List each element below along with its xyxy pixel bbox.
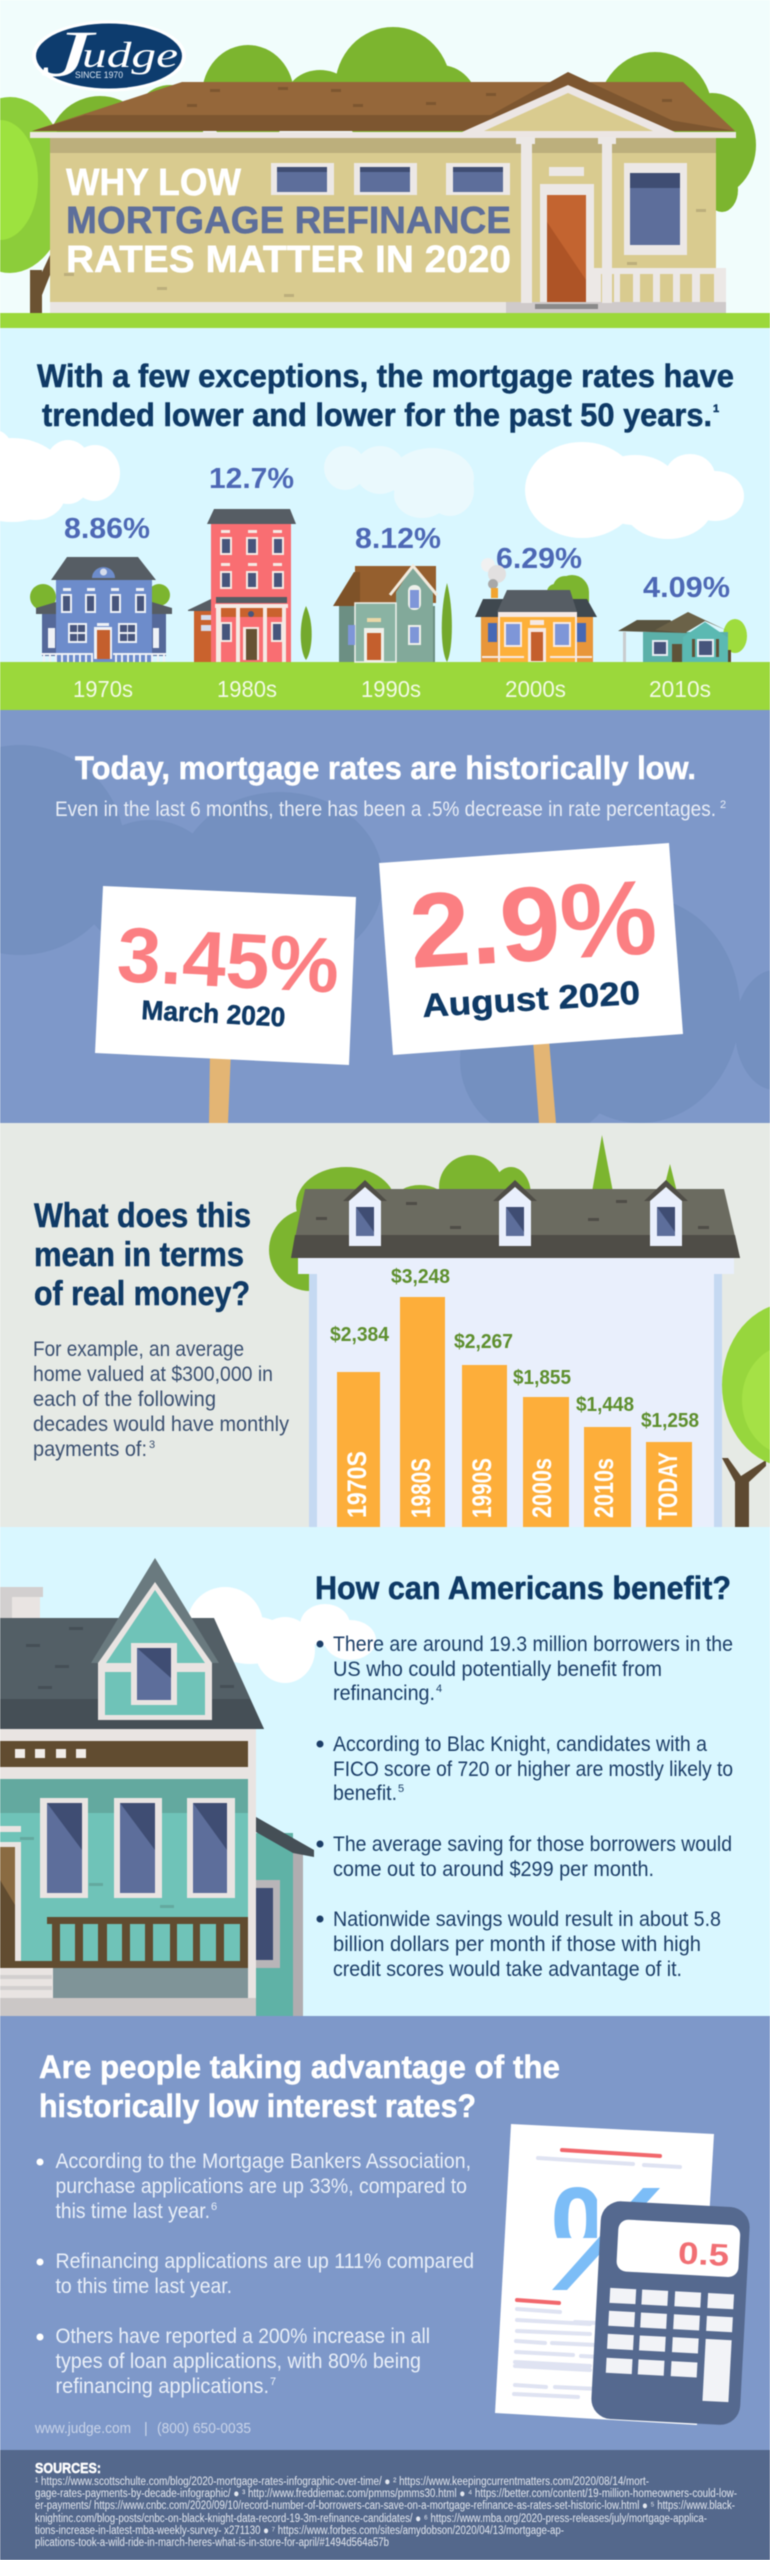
- rate values: 8.12%: [355, 523, 441, 555]
- rate values: 12.7%: [209, 463, 294, 495]
- bullet: savings: The average saving for those borrowers would: [333, 1833, 732, 1856]
- icon: 1980s house: [188, 509, 312, 662]
- sources list: tions-increase-in-latest-mba-weekly-survey- x271130 ● ⁷ https://www.forbes.com/sites/amydobson/2020/04/13/mortgage-ap-: [35, 2525, 564, 2537]
- heading: [37, 358, 734, 433]
- body text: each of the following: [33, 1388, 216, 1411]
- house wall: [30, 132, 736, 313]
- bullet: purchase applications: purchase applications are up 33%, compared to: [56, 2175, 467, 2198]
- sources list: plications-took-a-wild-ride-in-march-heres-what-is-in-store-for-april/#1494d564a57b: [35, 2537, 389, 2549]
- bullet: FICO: [316, 1733, 733, 1805]
- right window: [624, 163, 687, 255]
- rate values: [64, 463, 730, 604]
- heading: How can Americans benefit?: [315, 1570, 731, 1606]
- body text: [33, 1338, 289, 1461]
- sign: August 2020: August 2020: [421, 974, 641, 1024]
- bullet: loan applications: 7: [270, 2376, 276, 2388]
- bullet: nationwide: [316, 1908, 721, 1981]
- sign: March 2020: 3.45%: [115, 910, 341, 1010]
- sign: March 2020: March 2020: [141, 995, 286, 1033]
- back trees: [48, 27, 756, 212]
- bullet: FICO: benefit.: [333, 1782, 397, 1805]
- logo: J: [40, 18, 97, 91]
- bar chart: $3,248: [391, 1266, 450, 1288]
- panel: fifty year rates: [0, 328, 770, 710]
- decade labels: 1970s: [73, 676, 133, 702]
- heading: [39, 2049, 560, 2124]
- clouds: [0, 430, 744, 539]
- subheading: 2: [720, 799, 726, 811]
- icon: 1990s house: [333, 566, 452, 662]
- sign: August 2020: [379, 843, 683, 1123]
- bar chart: 1980S: [406, 1458, 436, 1518]
- bullet: savings: [316, 1833, 732, 1881]
- heading: Are people taking advantage of the: [39, 2049, 560, 2085]
- bullet: borrowers: There are around 19.3 million borrowers in the: [333, 1633, 733, 1656]
- bullet: savings: come out to around $299 per month.: [333, 1858, 654, 1881]
- cloud: [187, 1587, 376, 1683]
- bullet: refinancing applications: [36, 2250, 474, 2298]
- bullet: borrowers: refinancing.: [333, 1682, 435, 1705]
- bar chart: [330, 1266, 699, 1527]
- icon: calculator: [590, 2200, 751, 2426]
- bullet: FICO: According to Blac Knight, candidates with a: [333, 1733, 707, 1756]
- bullet: borrowers: 4: [436, 1683, 442, 1695]
- icon: paper document: %: [551, 2157, 669, 2322]
- trees behind house: [269, 1135, 677, 1291]
- panel: taking advantage: [0, 2016, 770, 2450]
- bullet: refinancing applications: to this time last year.: [56, 2275, 232, 2298]
- bar chart: $1,258: [641, 1410, 699, 1432]
- bar chart: 2010s: [589, 1458, 619, 1518]
- bullet: borrowers: [316, 1633, 733, 1705]
- bullet: FICO: FICO score of 720 or higher are mostly likely to: [333, 1758, 733, 1781]
- heading: Today, mortgage rates are historically low.: [75, 750, 696, 786]
- panel: historically low rates: [0, 710, 770, 1140]
- teal house: [0, 1558, 314, 2016]
- decade labels: 1980s: [217, 676, 277, 702]
- icon: calculator: 0.5: [677, 2235, 730, 2273]
- house with roof: [291, 1189, 740, 1527]
- tree: [442, 583, 452, 662]
- panel: header house: [0, 0, 770, 328]
- bar chart: $1,448: [576, 1394, 634, 1416]
- heading: historically low interest rates?: [39, 2088, 476, 2124]
- bar chart: $2,267: [454, 1331, 513, 1353]
- bullet: purchase applications: 6: [211, 2201, 217, 2213]
- contact line: [34, 2421, 251, 2437]
- bullet: purchase applications: According to the Mortgage Bankers Association,: [56, 2150, 471, 2173]
- bullet: loan applications: types of loan applications, with 80% being: [56, 2350, 421, 2373]
- body text: payments of:: [33, 1438, 147, 1461]
- decade labels: [73, 676, 711, 702]
- three windows: [271, 163, 510, 195]
- bullet: nationwide: billion dollars per month if those with high: [333, 1933, 701, 1956]
- sources list: ¹ https://www.scottschulte.com/blog/2020-mortgage-rates-infographic-over-time/ ● ² https://www.keepingcurrentmatters.com/2020/08/14/mort-: [35, 2476, 649, 2488]
- icon: paper document: [495, 2124, 714, 2425]
- panel: how Americans benefit: [0, 1527, 770, 2016]
- icon: 2010s house: [618, 612, 747, 662]
- heading: of real money?: [34, 1275, 250, 1313]
- heading: 1: [713, 403, 719, 415]
- title: RATES MATTER IN 2020: [66, 239, 511, 281]
- bar chart: 1970S: [342, 1451, 372, 1518]
- right tree: [722, 1303, 770, 1527]
- body text: home valued at $300,000 in: [33, 1363, 273, 1386]
- tree: [301, 606, 312, 660]
- bar chart: 2000s: [527, 1458, 557, 1518]
- bar chart: $2,384: [330, 1324, 390, 1346]
- logo: udge: [82, 35, 178, 75]
- bullet: loan applications: refinancing applications.: [56, 2375, 269, 2398]
- title: MORTGAGE REFINANCE: [66, 200, 511, 242]
- heading: With a few exceptions, the mortgage rates have: [37, 358, 734, 394]
- icon: 1970s house: [30, 557, 172, 662]
- bullet: purchase applications: this time last year.: [56, 2200, 210, 2223]
- heading: trended lower and lower for the past 50 years.: [42, 397, 712, 433]
- bullet: FICO: 5: [398, 1783, 404, 1795]
- logo: [32, 18, 186, 92]
- contact line: www.judge.com: [34, 2421, 131, 2437]
- gable: [462, 85, 675, 136]
- bullet: refinancing applications: Refinancing applications are up 111% compared: [56, 2250, 474, 2273]
- dormers: [343, 1180, 688, 1246]
- decade labels: 1990s: [361, 676, 421, 702]
- subheading: Even in the last 6 months, there has been a .5% decrease in rate percentages.: [55, 798, 716, 821]
- bullet: borrowers: US who could potentially benefit from: [333, 1658, 662, 1681]
- sources list: [35, 2476, 737, 2549]
- sources heading: SOURCES:: [35, 2460, 101, 2477]
- body text: decades would have monthly: [33, 1413, 289, 1436]
- sign: March 2020: [95, 886, 356, 1123]
- columns and door: [516, 137, 616, 303]
- rate values: 4.09%: [643, 572, 730, 604]
- icon: 2000s house: [475, 558, 597, 662]
- bullet: loan applications: Others have reported a 200% increase in all: [56, 2325, 430, 2348]
- heading: mean in terms: [34, 1236, 244, 1274]
- porch railing: [594, 268, 726, 302]
- rate values: 8.86%: [64, 513, 150, 545]
- bar chart: 1990S: [467, 1458, 497, 1518]
- left tree: [0, 97, 69, 313]
- panel: real money: [0, 1123, 770, 1527]
- heading: What does this: [34, 1197, 251, 1235]
- rate values: 6.29%: [496, 543, 582, 575]
- contact line: |: [144, 2421, 148, 2437]
- bullet: nationwide: credit scores would take advantage of it.: [333, 1958, 682, 1981]
- decade labels: 2000s: [505, 676, 566, 702]
- bullet: purchase applications: [36, 2150, 471, 2223]
- body text: 3: [149, 1439, 155, 1451]
- sign: August 2020: 2.9%: [406, 858, 660, 991]
- background clouds: [0, 745, 770, 1140]
- ground: [0, 662, 770, 710]
- title: WHY LOW: [66, 162, 241, 204]
- contact line: (800) 650-0035: [157, 2421, 251, 2437]
- bullet: nationwide: Nationwide savings would result in about 5.8: [333, 1908, 721, 1931]
- heading: [34, 1197, 251, 1313]
- roof: [32, 72, 735, 131]
- panel: sources: [0, 2450, 770, 2560]
- bar chart: $1,855: [513, 1367, 571, 1389]
- bar chart: TODAY: [653, 1452, 683, 1520]
- decade labels: 2010s: [649, 676, 711, 702]
- bullet: loan applications: [36, 2325, 430, 2398]
- title: [66, 162, 511, 281]
- body text: For example, an average: [33, 1338, 244, 1361]
- logo: SINCE 1970: [75, 70, 123, 81]
